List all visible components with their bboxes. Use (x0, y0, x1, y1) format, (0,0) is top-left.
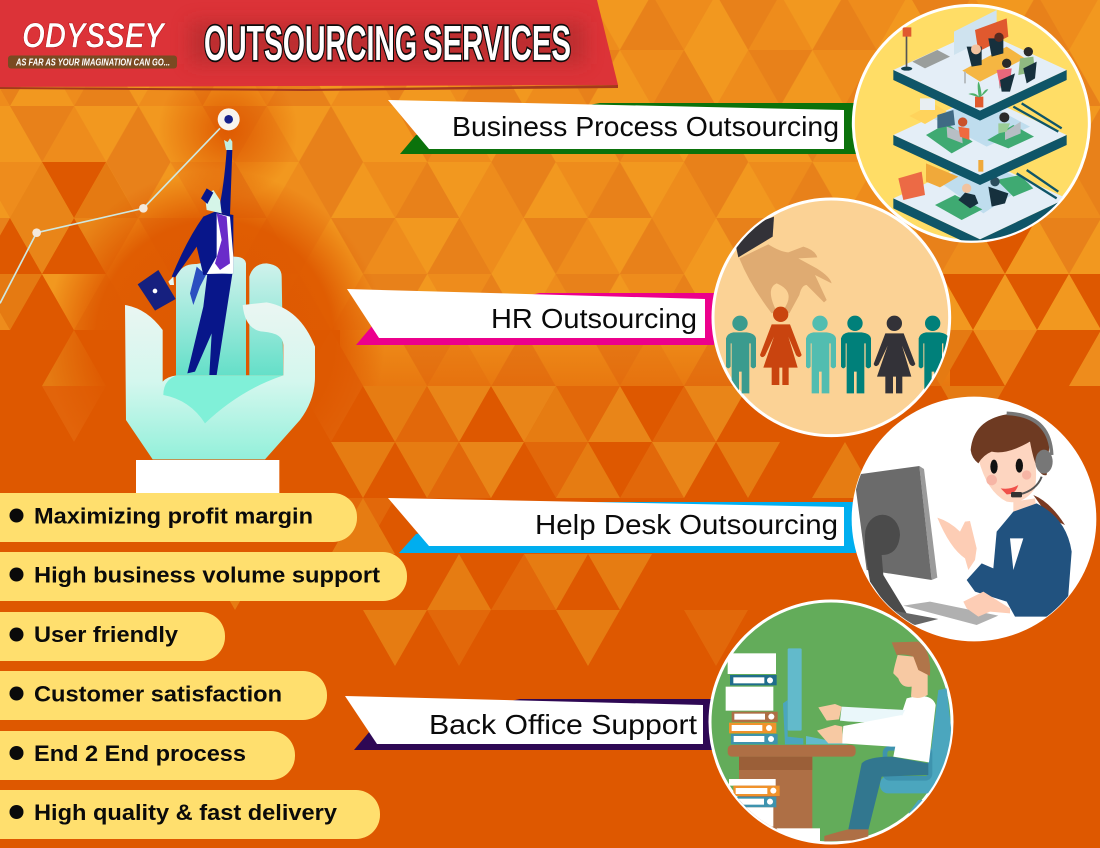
pill: Maximizing profit margin: Maximizing profit margin (34, 504, 313, 528)
pill: High business volume support: High business volume support (34, 562, 381, 588)
pill: High quality & fast delivery (0, 790, 380, 839)
desk (728, 745, 856, 830)
banner: Back Office Support (345, 696, 712, 750)
logo: ODYSSEY (22, 16, 166, 56)
pill: End 2 End process: End 2 End process (34, 741, 246, 766)
left triangles (0, 162, 106, 330)
businessman (138, 138, 233, 375)
pill: Customer satisfaction: Customer satisfaction (34, 682, 282, 706)
banner: Help Desk Outsourcing (388, 498, 856, 553)
document stacks and binders (726, 653, 820, 843)
logo: AS FAR AS YOUR IMAGINATION CAN GO... (15, 56, 170, 68)
pill: Maximizing profit margin (0, 493, 357, 542)
logo (8, 16, 177, 68)
banner: Business Process Outsourcing: Business Process Outsourcing (452, 111, 839, 142)
flat dark zones, left and right (0, 330, 1100, 386)
floor 2 (893, 95, 1067, 185)
floor 1 (893, 10, 1067, 121)
right triangles (941, 218, 1100, 330)
growth chart and businessman in hand (0, 108, 315, 493)
pill: High quality & fast delivery: High quality & fast delivery (34, 800, 338, 825)
agent (937, 413, 1072, 617)
banner: Help Desk Outsourcing: Help Desk Outsourcing (535, 509, 838, 540)
circle: help desk agent illustration (852, 397, 1096, 641)
pill: High business volume support (0, 552, 407, 601)
banner: HR Outsourcing: HR Outsourcing (491, 303, 697, 334)
floor 3 (893, 164, 1063, 241)
benefit list (0, 493, 407, 839)
circle: HR picking people illustration (713, 199, 950, 436)
pill: User friendly: User friendly (34, 622, 179, 647)
header ribbon (0, 0, 618, 91)
circle: office floors illustration (853, 5, 1089, 249)
lower triangles (331, 386, 748, 666)
circle: back office worker illustration (710, 601, 952, 843)
hand (736, 217, 832, 313)
monitor (854, 466, 938, 625)
banner: Business Process Outsourcing (388, 100, 856, 154)
monitor (783, 648, 848, 744)
hand (125, 257, 315, 493)
pill: End 2 End process (0, 731, 295, 780)
keyboard (903, 602, 998, 625)
banner: Back Office Support: Back Office Support (429, 709, 697, 740)
chart line (0, 108, 240, 303)
title: SERVICES (423, 17, 571, 71)
worker on chair (817, 642, 952, 841)
pill: Customer satisfaction (0, 671, 327, 720)
title: OUTSOURCING (204, 17, 417, 71)
row of people (726, 307, 949, 393)
pill: User friendly (0, 612, 225, 661)
banner: HR Outsourcing (347, 289, 714, 345)
